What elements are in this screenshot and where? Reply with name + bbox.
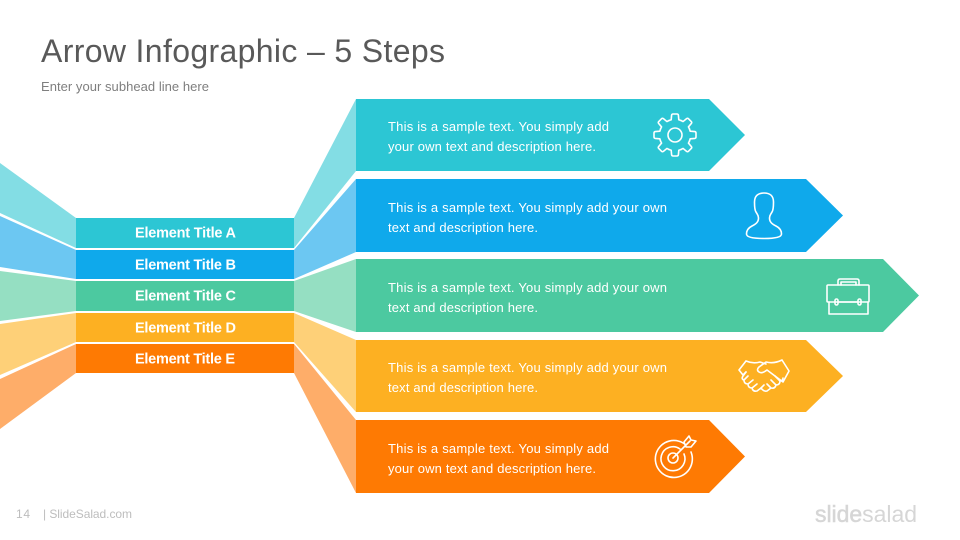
text D — [388, 360, 667, 395]
text D: text and description here. — [388, 380, 538, 395]
text C — [388, 280, 667, 315]
icon: target — [655, 436, 696, 477]
page number: 14 — [16, 507, 30, 521]
text B: This is a sample text. You simply add your own — [388, 200, 667, 215]
element title bars — [76, 218, 294, 373]
text A — [388, 119, 609, 154]
text A: your own text and description here. — [388, 139, 596, 154]
title: Arrow Infographic – 5 Steps — [41, 33, 445, 69]
text E: This is a sample text. You simply add — [388, 441, 609, 456]
arrow E — [356, 420, 745, 493]
arrow B — [356, 179, 843, 252]
text C: This is a sample text. You simply add your own — [388, 280, 667, 295]
text C: text and description here. — [388, 300, 538, 315]
bar: Element Title A — [76, 218, 294, 248]
left fan: incoming bands — [0, 163, 76, 429]
icon: gear — [654, 114, 696, 156]
bar: Element Title B — [76, 250, 294, 279]
bar: Element Title D — [76, 313, 294, 342]
arrow C — [356, 259, 919, 332]
text D: This is a sample text. You simply add your own — [388, 360, 667, 375]
subhead: Enter your subhead line here — [41, 79, 209, 94]
text A: This is a sample text. You simply add — [388, 119, 609, 134]
icon: briefcase — [827, 279, 869, 314]
bar: Element Title B: Element Title B — [135, 258, 236, 274]
bar: Element Title E: Element Title E — [135, 352, 235, 368]
bar: Element Title C: Element Title C — [135, 288, 237, 304]
text B — [388, 200, 667, 235]
arrow D — [356, 340, 843, 412]
arrow A — [356, 99, 745, 171]
text B: text and description here. — [388, 220, 538, 235]
icon: handshake — [739, 360, 789, 391]
logo: slidesalad: slidesalad — [815, 501, 917, 527]
icon: person — [746, 193, 782, 238]
footer source: | SlideSalad.com — [43, 507, 132, 521]
text E — [388, 441, 609, 476]
bar: Element Title E — [76, 344, 294, 373]
bar: Element Title C — [76, 281, 294, 311]
bar: Element Title A: Element Title A — [135, 226, 237, 242]
text E: your own text and description here. — [388, 461, 596, 476]
right fan: outgoing bands — [294, 99, 356, 493]
bar: Element Title D: Element Title D — [135, 320, 236, 336]
